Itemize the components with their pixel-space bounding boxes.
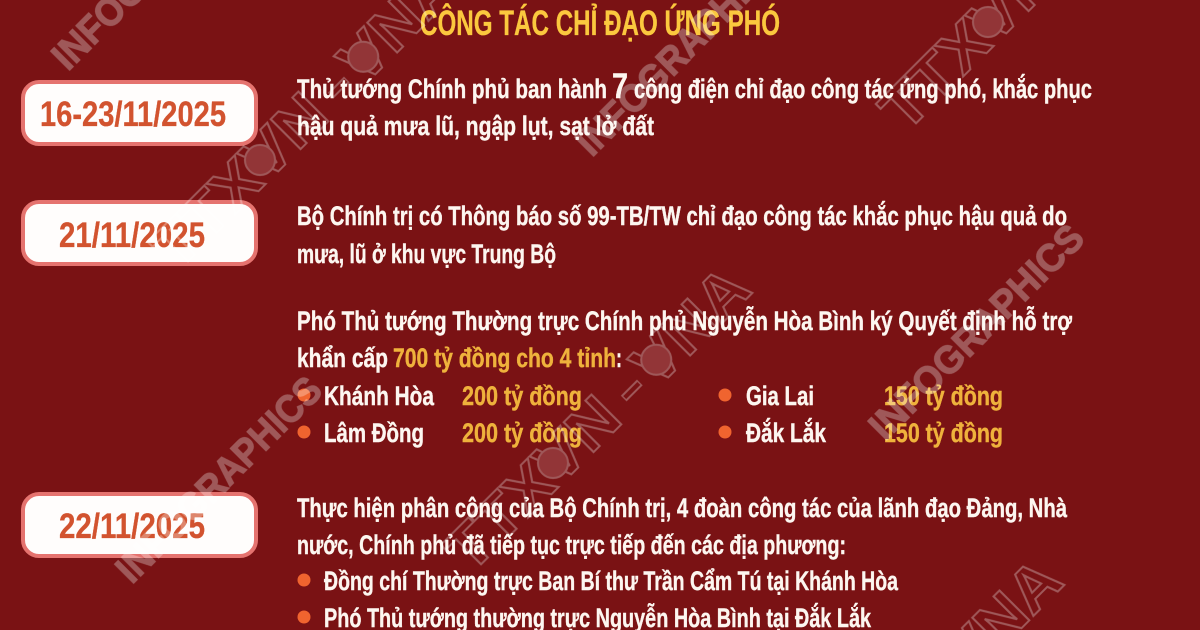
watermark: TTXVN - VNA stamps: TTXVN <box>431 382 634 585</box>
watermark: INFOGRAPHICS stamps: INFOGRAPHICS <box>861 216 1093 448</box>
text block: Politburo notice <box>297 200 1067 269</box>
list: province support amounts: 150 tỷ đồng <box>884 418 1003 448</box>
list: province support amounts: 200 tỷ đồng <box>462 418 582 448</box>
text block: directives: hậu quả mưa lũ, ngập lụt, sạt lở đất <box>297 111 654 141</box>
date badge: 16-23/11/2025: 16-23/11/2025 <box>40 95 226 134</box>
panel: entry 16-23/11/2025 <box>23 67 1092 144</box>
list: province support amounts: Gia Lai <box>746 381 814 411</box>
watermark: INFOGRAPHICS stamps: INFOGRAPHICS <box>108 369 331 591</box>
date badge: 21/11/2025 <box>23 202 256 264</box>
list: delegation leaders: Đồng chí Thường trực Ban Bí thư Trần Cẩm Tú tại Khánh Hòa <box>324 566 899 596</box>
panel: entry 22/11/2025 <box>23 493 1068 630</box>
watermark: TTXVN - VNA stamps: VNA <box>617 253 763 399</box>
text block: directives: Thủ tướng Chính phủ ban hành <box>297 74 607 104</box>
date badge: 16-23/11/2025 <box>23 82 256 144</box>
text block: working delegations <box>297 493 1068 560</box>
date badge: 22/11/2025 <box>23 494 256 556</box>
text block: directives <box>297 67 1092 141</box>
text block: Politburo notice: mưa, lũ ở khu vực Trung Bộ <box>297 239 556 269</box>
panel: entry 21/11/2025 <box>23 200 1073 448</box>
text block: emergency support decision <box>297 305 1073 373</box>
text block: working delegations: nước, Chính phủ đã tiếp tục trực tiếp đến các địa phương: <box>297 530 846 560</box>
watermark: TTXVN - VNA stamps: TTXVN <box>138 79 341 282</box>
text block: emergency support decision: khẩn cấp <box>297 343 388 373</box>
watermark: TTXVN - VNA stamps: – <box>596 355 661 420</box>
date badge: 22/11/2025: 22/11/2025 <box>59 507 205 546</box>
list: province support amounts: Khánh Hòa <box>324 381 435 411</box>
watermark: TTXVN - VNA stamps: – <box>303 52 368 117</box>
text block: directives: 7 <box>612 67 628 106</box>
date badge: 21/11/2025: 21/11/2025 <box>59 216 205 255</box>
title: CÔNG TÁC CHỈ ĐẠO ỨNG PHÓ <box>420 3 780 43</box>
text block: emergency support decision: : <box>616 343 622 373</box>
list: province support amounts: 150 tỷ đồng <box>884 381 1003 411</box>
list: province support amounts <box>298 381 1003 448</box>
list: province support amounts: Đắk Lắk <box>746 417 827 448</box>
list: province support amounts: 200 tỷ đồng <box>462 381 582 411</box>
list: delegation leaders <box>298 566 899 630</box>
text block: emergency support decision: 700 tỷ đồng cho 4 tỉnh <box>393 343 616 373</box>
list: province support amounts: Lâm Đồng <box>324 418 424 448</box>
watermark: TTXVN - VNA stamps <box>138 0 1075 630</box>
